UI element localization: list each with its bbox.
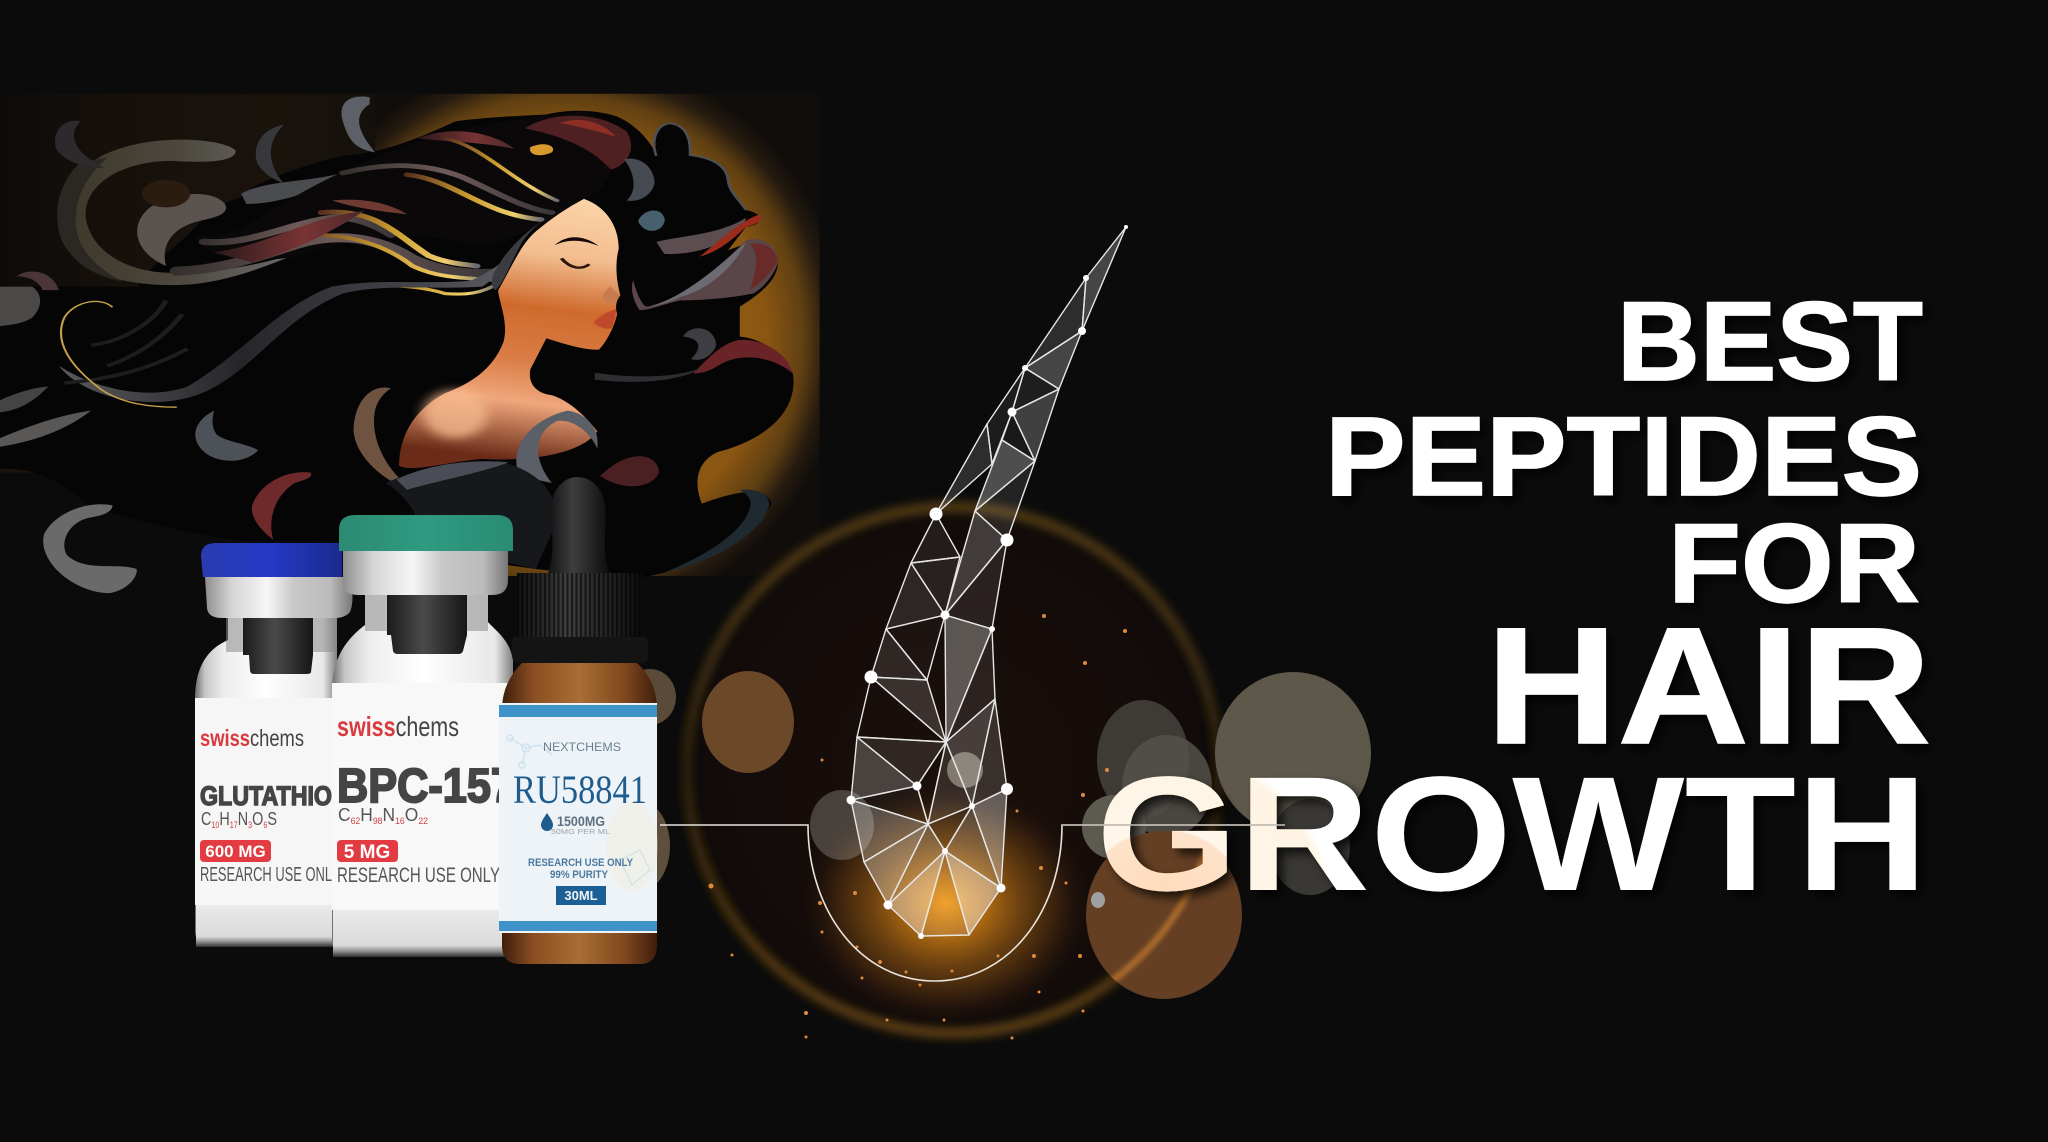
paper label: [499, 703, 657, 933]
secondary dim strands: [64, 300, 187, 383]
vial cap green: [339, 515, 513, 551]
illustration: woman with flowing hair: [0, 94, 820, 593]
ember particles: [708, 614, 1127, 1040]
label bottom stripe: [499, 921, 657, 931]
formula: C: [201, 809, 214, 829]
vial body: [332, 595, 513, 957]
lips: [594, 309, 616, 329]
formula: O: [252, 809, 263, 829]
amber glass: [502, 663, 657, 964]
bokeh: small by G: [1082, 795, 1146, 859]
bokeh: near dropper: [624, 669, 676, 725]
purity: 99% PURITY: [550, 869, 609, 881]
dose badge: [337, 840, 398, 863]
vial base powder: [333, 910, 513, 957]
upper left curl ribbon: [58, 140, 300, 285]
dropper collar: [517, 573, 642, 639]
bokeh: inside hair: [947, 752, 983, 788]
formula: H: [360, 805, 373, 825]
inner left curl: [137, 194, 226, 266]
concentration: 50MG PER ML: [551, 827, 610, 836]
strength: 1500MG: [557, 813, 605, 829]
bokeh: faint behind R: [1270, 799, 1350, 895]
bokeh: gray right 2: [1122, 735, 1212, 837]
formula: 16: [395, 816, 405, 826]
golden strands: [289, 139, 557, 294]
hair strand low-poly mesh: [846, 225, 1128, 939]
logo swisschems: swisschems: [200, 725, 304, 751]
formula: N: [238, 809, 248, 829]
formula: N: [383, 805, 395, 825]
maroon strand bands: [214, 211, 364, 263]
curl dark backing: [57, 157, 123, 281]
connector line crossing title: [1062, 824, 1285, 826]
orange glow behind head: [375, 94, 820, 576]
title line: PEPTIDES: PEPTIDES: [1325, 394, 1922, 519]
formula: 62: [351, 816, 360, 826]
bokeh: large olive: [1215, 672, 1371, 834]
product name: GLUTATHIO: [200, 781, 332, 811]
bokeh: brown left: [702, 671, 794, 773]
vial label: [332, 683, 513, 910]
glow ring: [685, 503, 1221, 1037]
dropper teat: [548, 477, 610, 573]
title line: FOR: FOR: [1668, 501, 1920, 626]
right side contour highlight: [654, 123, 746, 210]
mesh nodes: [846, 225, 1128, 939]
thin curl by shoulder: [354, 387, 418, 493]
vial: BPC-157: [332, 515, 515, 957]
bokeh: behind dropper label: [610, 801, 670, 891]
face, neck and shoulders: [399, 199, 620, 468]
closed eye: [561, 258, 589, 268]
volume badge: [556, 886, 606, 905]
crown gray lobes: [624, 159, 655, 201]
lower curl wisps: [195, 411, 258, 461]
lower sweeping gray tress: [59, 252, 514, 402]
brown patch inside curl: [142, 180, 190, 207]
vial neck shadow: [226, 618, 337, 652]
ring interior: [685, 503, 1221, 1037]
vial label: [195, 698, 337, 905]
drop icon: [541, 813, 553, 831]
vial crimp: [205, 577, 352, 618]
label top stripe: [499, 705, 657, 717]
title line: BEST: BEST: [1617, 279, 1923, 404]
bokeh: tiny gray: [1091, 892, 1105, 908]
hair strand beside face: [492, 199, 584, 290]
gray ring wisp on chest: [516, 411, 598, 483]
product name: BPC-157: [337, 760, 515, 813]
bokeh circles: [644, 669, 1371, 999]
mauve tress bands: [177, 166, 552, 273]
research note: RESEARCH USE ONLY: [337, 864, 500, 887]
vial cap blue: [201, 543, 342, 577]
formula: 10: [211, 820, 219, 830]
title: [1096, 279, 1931, 925]
brown backdrop top left: [0, 94, 386, 290]
brow: [554, 237, 599, 246]
collar ribbing: [517, 573, 642, 639]
vial crimp: [343, 551, 508, 595]
formula: 3: [248, 820, 252, 830]
vial stopper: [243, 618, 313, 674]
dropper bottle: RU58841: [499, 477, 658, 964]
formula: O: [405, 805, 418, 825]
hair mass silhouette: [0, 111, 794, 579]
formula: C: [338, 805, 351, 825]
vial base powder: [196, 905, 337, 947]
product name: RU58841: [513, 767, 647, 812]
follicle outline and connector lines: [660, 825, 1285, 981]
maroon crown highlight: [525, 116, 631, 170]
orange follicle glow: [796, 778, 1096, 1028]
top swirl wisps: [341, 97, 375, 152]
formula: H: [219, 809, 230, 829]
formula: 17: [230, 820, 238, 830]
main upper tress: [193, 111, 613, 260]
dropper flange: [512, 637, 648, 663]
bokeh: gray left of follicle: [810, 790, 874, 860]
vial stopper: [387, 595, 467, 654]
thin gold curl left: [61, 301, 177, 407]
dose badge: 5 MG: [344, 842, 390, 863]
research note: RESEARCH USE ONL: [200, 864, 332, 886]
formula: 6: [263, 820, 267, 830]
logo swisschems: swisschems: [337, 711, 459, 742]
ring outer glow: [687, 507, 1219, 1033]
brand: NEXTCHEMS: [543, 740, 621, 754]
formula: S: [267, 809, 277, 829]
research note: RESEARCH USE ONLY: [528, 857, 634, 869]
lower left brown patch: [0, 438, 96, 473]
nose shade: [603, 287, 620, 304]
warm bokeh tint on label: [606, 801, 658, 891]
formula: 98: [373, 816, 383, 826]
dose badge: 600 MG: [205, 842, 266, 861]
title line: GROWTH: GROWTH: [1096, 742, 1928, 925]
bokeh: large brown: [1086, 831, 1242, 999]
formula: 22: [418, 816, 428, 826]
right side hair highlights: [638, 211, 665, 231]
volume badge: 30ML: [564, 888, 598, 903]
vial neck shadow: [365, 595, 488, 631]
title line: HAIR: HAIR: [1486, 594, 1931, 779]
ring streak through brown bokeh: [1110, 848, 1203, 983]
bokeh: gray right 1: [1097, 700, 1189, 818]
molecule pattern: [507, 735, 650, 885]
vial body: [195, 618, 337, 947]
left edge gray strands: [0, 287, 40, 326]
shoulder highlight: [423, 390, 487, 438]
vial: glutathione: [195, 543, 352, 947]
sleeve drape: [386, 462, 557, 569]
